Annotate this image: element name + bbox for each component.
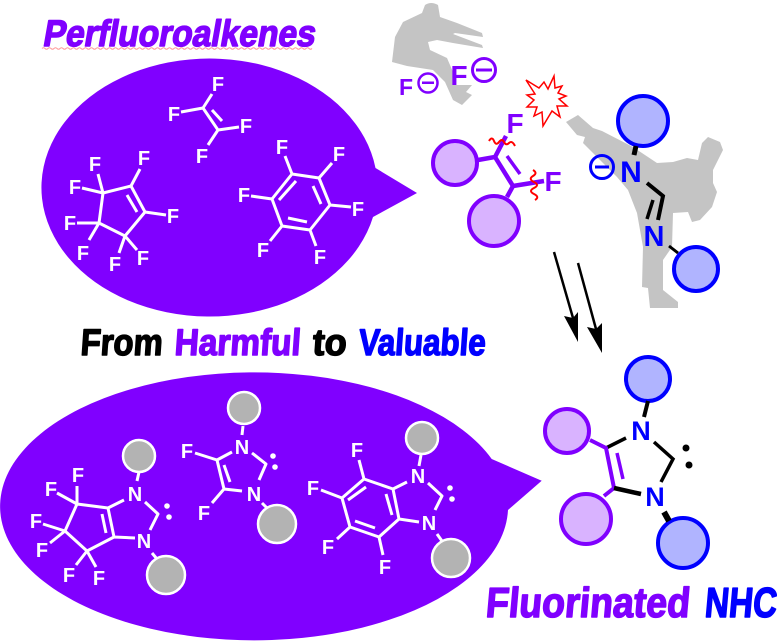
molecule: hexafluorobenzene: F: [238, 185, 250, 207]
fluoride anion, lower: F: [399, 74, 413, 100]
molecule: blue amidinate anion: [590, 96, 718, 291]
molecule: perfluorocyclopentene: F: [137, 248, 149, 270]
panel: perfluoroalkenes speech bubble: [41, 59, 417, 317]
molecule: hexafluorobenzene: F: [314, 247, 326, 269]
arrow: second reaction arrow: [578, 263, 602, 353]
arrow: forward reaction: [554, 252, 578, 342]
molecule: perfluorocyclopentene: F: [167, 206, 179, 228]
molecule: cyclopentene-fused NHC: N: [128, 484, 142, 506]
molecule: tetrafluorobenzimidazole NHC: N: [422, 513, 436, 535]
molecule: perfluorocyclopentene: F: [138, 148, 150, 170]
molecule: cyclopentene-fused NHC: F: [72, 465, 84, 487]
molecule: cyclopentene-fused NHC: F: [45, 479, 57, 501]
molecule: perfluorocyclopentene: F: [109, 254, 121, 276]
molecule: difluoro NHC: F: [181, 441, 193, 463]
molecule: cyclopentene-fused NHC: F: [93, 568, 105, 590]
heading: From Harmful to Valuable: [79, 321, 487, 363]
molecule: perfluorocyclopentene: [64, 148, 179, 276]
molecule: purple perfluoroalkene reactant: F: [506, 108, 524, 139]
molecule: hexafluorobenzene: F: [276, 137, 288, 159]
molecule: tetrafluorobenzimidazole NHC: [307, 422, 470, 579]
molecule: tetrafluorobenzimidazole NHC: N: [411, 466, 425, 488]
molecule: purple perfluoroalkene reactant: F: [544, 166, 562, 197]
heading: From Harmful to Valuable: Harmful: [173, 321, 302, 363]
molecule: hexafluorobenzene: [238, 137, 364, 269]
red cleavage wavy marks: [489, 138, 537, 200]
heading: Fluorinated NHC: Fluorinated: [484, 579, 692, 626]
molecule: tetrafluorobenzimidazole NHC: F: [322, 537, 334, 559]
molecule: difluoro NHC: F: [198, 503, 210, 525]
molecule: blue amidinate anion: N: [620, 156, 642, 189]
molecule: hexafluorobenzene: F: [333, 144, 345, 166]
fluoride anion, upper: F: [450, 60, 468, 91]
molecule: hexafluorobenzene: F: [352, 199, 364, 221]
title: Perfluoroalkenes: Perfluoroalkenes: [41, 12, 320, 54]
icon: kicking fighter silhouette: [566, 115, 723, 308]
molecule: blue amidinate anion: N: [644, 221, 664, 253]
molecule: tetrafluoroethylene: F: [196, 146, 208, 168]
molecule: tetrafluorobenzimidazole NHC: F: [307, 478, 319, 500]
molecule: cyclopentene-fused NHC: F: [30, 511, 42, 533]
molecule: generic fluorinated NHC: N: [645, 482, 665, 512]
molecule: hexafluorobenzene: F: [257, 240, 269, 262]
molecule: purple perfluoroalkene reactant: [433, 108, 562, 246]
molecule: perfluorocyclopentene: F: [89, 154, 101, 176]
molecule: difluoro NHC: [181, 392, 296, 543]
panel: fluorinated NHC speech bubble: [0, 372, 542, 640]
molecule: cyclopentene-fused NHC: F: [36, 540, 48, 562]
molecule: generic fluorinated NHC: [545, 357, 708, 568]
fluoride anion, upper: [450, 58, 496, 91]
molecule: tetrafluoroethylene: F: [212, 74, 224, 96]
molecule: cyclopentene-fused NHC: F: [63, 565, 75, 587]
molecule: perfluorocyclopentene: F: [69, 177, 81, 199]
fluoride anion, lower: [399, 74, 438, 100]
heading: From Harmful to Valuable: From: [79, 321, 164, 363]
heading: From Harmful to Valuable: Valuable: [357, 321, 487, 363]
molecule: tetrafluoroethylene: F: [168, 104, 180, 126]
molecule: perfluorocyclopentene: F: [77, 243, 89, 265]
molecule: tetrafluoroethylene: [168, 74, 252, 168]
molecule: tetrafluoroethylene: F: [240, 116, 252, 138]
molecule: tetrafluorobenzimidazole NHC: F: [351, 440, 363, 462]
molecule: tetrafluorobenzimidazole NHC: F: [379, 557, 391, 579]
molecule: difluoro NHC: N: [247, 484, 261, 506]
molecule: cyclopentene-fused NHC: N: [137, 531, 151, 553]
icon: red impact burst: [526, 76, 567, 126]
molecule: cyclopentene-fused NHC: [30, 440, 185, 594]
icon: jumping fighter silhouette: [392, 3, 483, 105]
molecule: difluoro NHC: N: [235, 437, 249, 459]
heading: From Harmful to Valuable: to: [311, 321, 348, 363]
molecule: perfluorocyclopentene: F: [64, 213, 76, 235]
molecule: generic fluorinated NHC: N: [631, 416, 651, 446]
